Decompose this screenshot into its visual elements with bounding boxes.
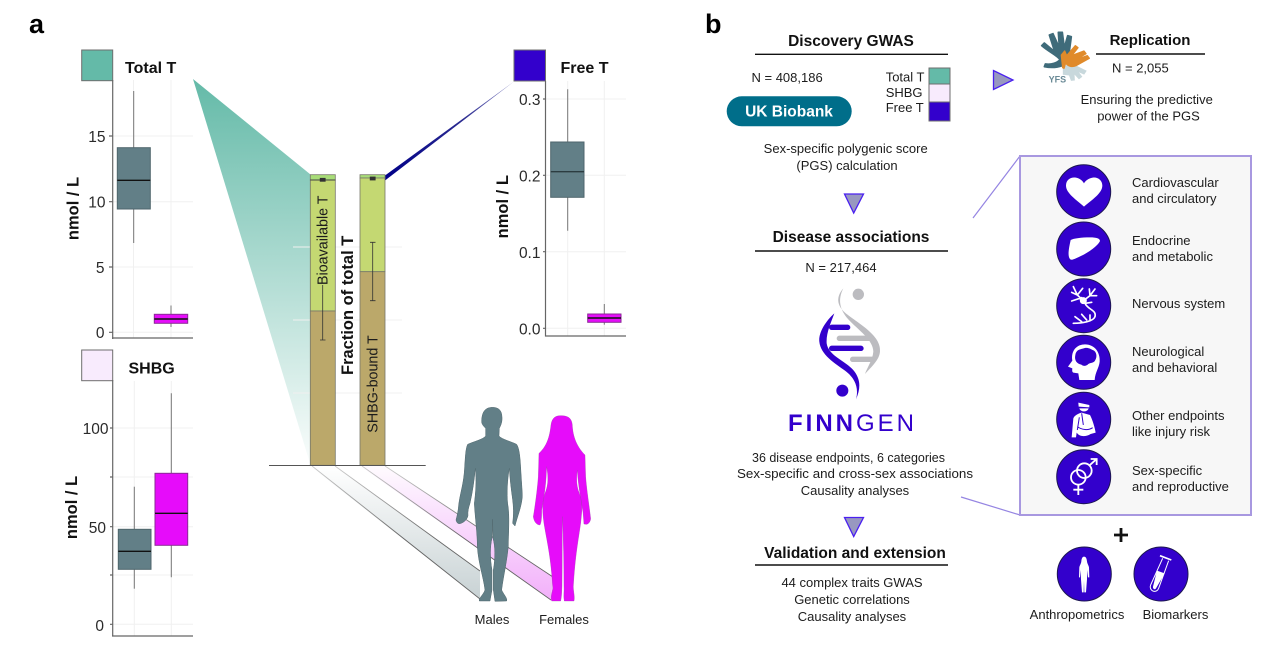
label: anthropometrics: Anthropometrics	[1030, 607, 1125, 622]
female box	[588, 304, 621, 325]
disease association details	[737, 450, 974, 498]
label: bioavailable T: Bioavailable T	[316, 195, 332, 285]
axis label: fraction of total T: Fraction of total T	[339, 236, 357, 375]
icon: heart	[1057, 165, 1111, 219]
panel label a: a	[29, 9, 45, 39]
label: biomarkers: Biomarkers	[1143, 607, 1209, 622]
y-axis label: nmol / L	[64, 177, 82, 240]
logo: YFS hand: YFS	[1049, 74, 1066, 84]
disease association details: Sex-specific and cross-sex associations	[737, 466, 974, 481]
logo: YFS hand	[1042, 32, 1089, 84]
label: cardiovascular: and circulatory	[1132, 191, 1217, 206]
y-axis ticks: 15	[88, 129, 106, 146]
details: Genetic correlations	[794, 592, 910, 607]
y-axis ticks: 0.1	[519, 245, 540, 262]
label: Females: Females	[539, 612, 589, 627]
icon: sex symbols	[1057, 450, 1111, 504]
y-axis label: nmol / L	[494, 175, 512, 238]
heading: Validation and extension	[764, 545, 946, 562]
male stacked bar	[310, 175, 335, 465]
connector lines to disease categories	[961, 156, 1020, 515]
y-axis ticks: 5	[96, 260, 104, 277]
stacked bar chart: fraction of total T	[269, 175, 426, 465]
icon: injured person	[1057, 392, 1111, 446]
label: cardiovascular: Cardiovascular	[1132, 175, 1219, 190]
heading: Free T: Free T	[560, 60, 609, 77]
icon: liver	[1057, 222, 1111, 276]
icon: anthropometrics	[1057, 547, 1111, 601]
baseline	[269, 464, 426, 466]
heading: SHBG: SHBG	[128, 360, 175, 378]
heading: Total T: Total T	[125, 60, 176, 77]
section: Validation and extension	[755, 545, 948, 624]
male box	[118, 487, 151, 589]
y-axis ticks	[88, 129, 106, 342]
icon: head with brain	[1057, 335, 1111, 389]
y-axis ticks: 0	[95, 618, 104, 635]
y-axis ticks: 100	[83, 421, 109, 438]
label: other endpoints: Other endpoints	[1132, 408, 1225, 423]
details: 44 complex traits GWAS	[781, 575, 923, 590]
UK Biobank pill: UK Biobank	[745, 104, 833, 121]
label: sex-specific: Sex-specific	[1132, 463, 1203, 478]
section: Disease associations	[755, 229, 948, 275]
axes	[109, 80, 193, 339]
y-axis ticks	[519, 92, 541, 338]
label: nervous system: Nervous system	[1132, 296, 1225, 311]
y-axis ticks	[83, 421, 109, 635]
female box	[154, 306, 188, 327]
shadow: female band	[360, 466, 553, 600]
legend: Free T	[886, 100, 924, 115]
description: power of the PGS	[1097, 108, 1200, 124]
legend: Total T	[886, 70, 925, 85]
arrow: disease to validation	[844, 518, 864, 536]
heading: Replication	[1110, 32, 1190, 49]
axes	[110, 380, 193, 636]
plus sign	[1114, 528, 1128, 542]
male box	[551, 89, 584, 231]
y-axis ticks: 0.0	[519, 322, 541, 338]
shadow: male band	[310, 466, 480, 599]
female box	[155, 393, 188, 577]
panel: disease categories	[1020, 156, 1251, 515]
icon: neuron	[1057, 279, 1111, 333]
details	[781, 575, 923, 624]
label: neurological: Neurological	[1132, 344, 1204, 359]
swatch: Free T	[514, 50, 546, 81]
legend	[886, 68, 950, 121]
PGS text: Sex-specific polygenic score	[764, 141, 928, 156]
error bars	[320, 177, 376, 340]
swatch: Total T	[82, 50, 113, 81]
heading: Discovery GWAS	[788, 33, 914, 50]
heading: Disease associations	[773, 229, 929, 246]
label: sex-specific	[1132, 463, 1229, 494]
funnel: total T to stacked bar	[193, 79, 310, 465]
logo: FinnGen DNA	[819, 288, 880, 399]
y-axis ticks: 0.3	[519, 92, 540, 109]
sample size: N = 2,055	[1112, 60, 1169, 76]
PGS text: (PGS) calculation	[796, 158, 898, 173]
label: SHBG-bound T: SHBG-bound T	[366, 335, 382, 433]
arrow: discovery to replication	[994, 70, 1013, 90]
logo: FinnGen wordmark: FINNGEN	[788, 410, 914, 437]
details: Causality analyses	[798, 609, 907, 624]
label: endocrine: Endocrine	[1132, 233, 1191, 248]
funnel: free T to stacked bar	[385, 82, 514, 180]
disease association details: Causality analyses	[801, 483, 910, 498]
boxplot: SHBG	[63, 350, 193, 636]
panel label b: b	[705, 9, 722, 39]
label: endocrine: and metabolic	[1132, 249, 1213, 264]
silhouette: female	[533, 416, 591, 601]
arrow: discovery to disease associations	[844, 194, 864, 213]
UK Biobank pill	[727, 96, 852, 126]
PGS text	[764, 141, 928, 173]
label: other endpoints	[1132, 408, 1225, 439]
sample size: N = 217,464	[805, 260, 877, 275]
description: Ensuring the predictive	[1081, 92, 1213, 107]
label: neurological	[1132, 344, 1217, 375]
female stacked bar	[360, 175, 385, 465]
y-axis ticks: 0	[96, 325, 105, 342]
label: other endpoints: like injury risk	[1132, 424, 1211, 439]
y-axis ticks: 10	[88, 194, 106, 212]
section: Discovery GWAS	[727, 33, 950, 173]
section: Replication	[1081, 32, 1213, 124]
male box	[117, 91, 150, 243]
label: cardiovascular	[1132, 175, 1219, 206]
icon: test tube	[1134, 547, 1188, 601]
disease association details: 36 disease endpoints, 6 categories	[752, 450, 945, 465]
boxplot: Free T	[494, 50, 626, 338]
description	[1081, 92, 1213, 124]
label: endocrine	[1132, 233, 1213, 264]
label: sex-specific: and reproductive	[1132, 479, 1229, 494]
legend: SHBG	[886, 85, 923, 100]
label: Males: Males	[475, 612, 510, 627]
y-axis label: nmol / L	[63, 476, 81, 539]
sample size: N = 408,186	[752, 70, 823, 85]
boxplot: Total T	[64, 50, 193, 342]
swatch: SHBG	[82, 350, 113, 381]
silhouette: male	[456, 407, 522, 601]
y-axis ticks: 0.2	[519, 168, 540, 186]
axes	[543, 81, 626, 336]
label: neurological: and behavioral	[1132, 360, 1217, 375]
y-axis ticks: 50	[89, 520, 106, 537]
